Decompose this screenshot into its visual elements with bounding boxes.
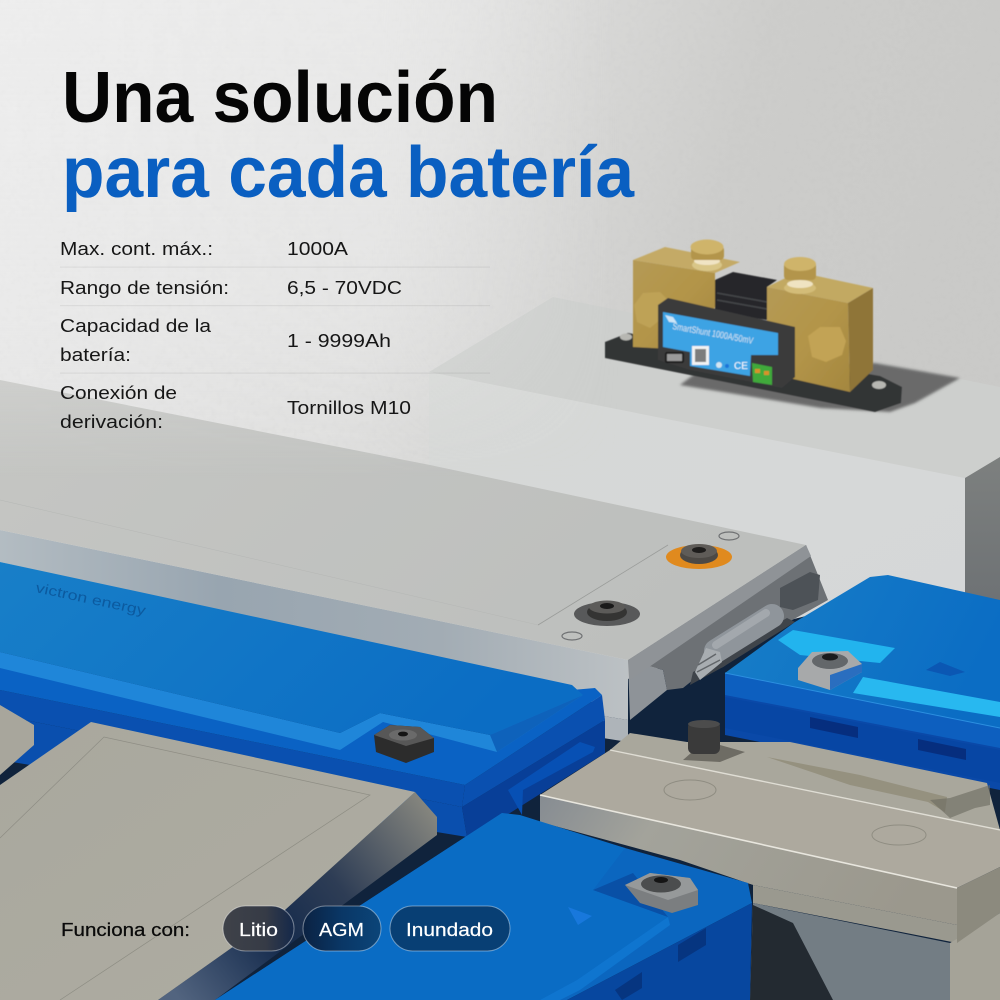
dark gap under the batteries — [0, 600, 1000, 1000]
vent post — [683, 720, 745, 762]
cable — [690, 613, 795, 685]
front-left beige battery — [0, 722, 437, 1000]
hex bolt — [798, 651, 862, 690]
embossed logo text: victron energy — [34, 579, 147, 618]
polarity marks — [562, 532, 739, 640]
lower battery stack illustration — [0, 380, 1000, 1000]
title: Una solución — [62, 58, 498, 138]
rear beige battery — [540, 720, 1000, 1000]
pill: Inundado: Inundado — [406, 919, 493, 940]
title: para cada batería — [62, 133, 635, 213]
QR code — [692, 346, 709, 365]
row: voltage range: Rango de tensión: — [60, 277, 229, 298]
pill: Inundado — [390, 906, 510, 951]
row: shunt connection: Tornillos M10 — [287, 397, 411, 418]
row: max continuous current — [60, 238, 349, 259]
pill: Litio: Litio — [239, 919, 278, 940]
row: battery capacity — [60, 315, 391, 365]
blue label — [663, 312, 778, 376]
terminal: negative — [574, 600, 640, 626]
left brass block — [633, 240, 740, 350]
row: shunt connection — [60, 382, 411, 432]
pill: AGM: AGM — [319, 919, 364, 940]
right blue battery — [725, 575, 1000, 790]
concrete wall background — [0, 0, 1000, 620]
status LEDs — [716, 362, 729, 368]
row: battery capacity: batería: — [60, 344, 131, 365]
white haze behind the text — [0, 0, 426, 396]
hex bolt — [625, 873, 698, 913]
specifications table — [60, 238, 490, 432]
CE mark: CE — [734, 361, 748, 372]
row: max continuous current: 1000A — [287, 238, 349, 259]
title — [62, 58, 635, 213]
VE.Direct port — [666, 353, 683, 362]
centre bus bar — [715, 272, 777, 320]
row: voltage range: 6,5 - 70VDC — [287, 277, 402, 298]
module housing — [658, 298, 795, 388]
row: shunt connection: derivación: — [60, 411, 163, 432]
terminal: positive orange — [666, 544, 732, 569]
centre blue battery — [0, 562, 605, 837]
right brass block — [767, 257, 873, 392]
row: max continuous current: Max. cont. máx.: — [60, 238, 213, 259]
pill: AGM — [303, 906, 381, 951]
pill: Litio — [223, 906, 294, 951]
row: battery capacity: 1 - 9999Ah — [287, 330, 391, 351]
product: SmartShunt — [605, 240, 960, 412]
cast shadow — [680, 363, 960, 412]
front blue battery — [215, 813, 752, 1000]
row: voltage range — [60, 277, 402, 298]
green connector — [752, 363, 772, 385]
row: battery capacity: Capacidad de la — [60, 315, 212, 336]
label: works with: Funciona con: — [61, 919, 190, 940]
row: shunt connection: Conexión de — [60, 382, 177, 403]
base plate — [605, 333, 902, 412]
blue label: SmartShunt 1000A/50mV — [671, 321, 755, 347]
small beige block, left edge — [0, 705, 34, 775]
compatibility row — [61, 906, 510, 951]
concrete plinth block — [429, 297, 1000, 620]
screws — [620, 334, 632, 340]
hex bolt — [374, 725, 434, 763]
grey battery — [0, 380, 828, 742]
